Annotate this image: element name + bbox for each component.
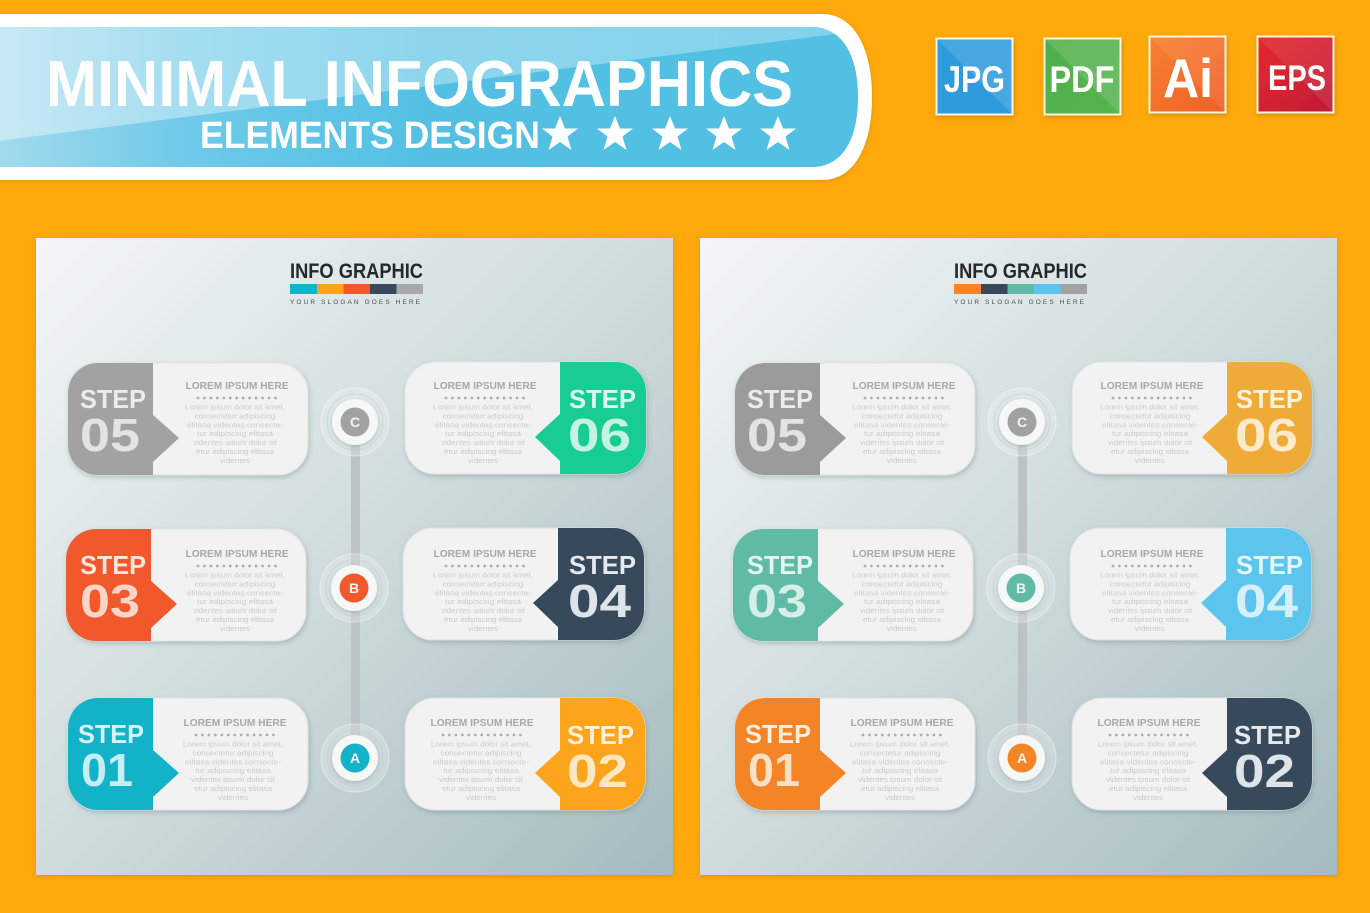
card: step 06: videntes ipsum dolor sit (1108, 438, 1193, 447)
card: step 04: Lorem ipsum dolor sit amet, (433, 570, 533, 580)
card: step 03 (66, 529, 306, 641)
marker A: A (350, 750, 360, 766)
card: step 04: STEP (1236, 550, 1303, 580)
heading: right panel: INFO GRAPHIC (954, 259, 1087, 283)
card: step 01: videntes (885, 793, 915, 802)
card: step 03: etur adipiscing elitasa (863, 615, 942, 624)
card: step 05: STEP (80, 384, 146, 414)
card: step 05: Lorem ipsum dolor sit amet, (185, 402, 285, 412)
heading: left panel: INFO GRAPHIC (290, 259, 423, 283)
card: step 02: etur adipiscing elitasa (1109, 784, 1188, 793)
heading: right panel: YOUR SLOGAN GOES HERE (954, 299, 1085, 306)
card: step 03: tur adipiscing elitasa (864, 597, 941, 606)
card: step 02: tur adipiscing elitasa (443, 766, 520, 775)
card: step 02: 02 (1234, 745, 1295, 797)
card: step 02: 02 (567, 745, 628, 797)
card: step 06: STEP (569, 384, 636, 414)
card: step 05 (68, 363, 308, 475)
card: step 01: etur adipiscing elitasa (194, 784, 273, 793)
card: step 01: elitasa videntes consecte- (852, 757, 949, 766)
banner subtitle: ELEMENTS DESIGN (200, 115, 540, 157)
card: step 03: consectetur adipiscing (862, 579, 942, 588)
card: step 06: etur adipiscing elitasa (444, 447, 523, 456)
card: step 05: tur adipiscing elitasa (197, 429, 274, 438)
card: step 02: videntes (466, 793, 496, 802)
card: step 04: videntes (1135, 624, 1165, 633)
card: step 02 (1072, 698, 1312, 810)
card: step 01 (735, 698, 975, 810)
card: step 05: etur adipiscing elitasa (863, 447, 942, 456)
marker C: C (350, 414, 360, 430)
card: step 05 (735, 363, 975, 475)
card: step 02: videntes ipsum dolor sit (1106, 775, 1191, 784)
card: step 06: tur adipiscing elitasa (445, 429, 522, 438)
marker B (320, 554, 388, 622)
card: step 02: STEP (567, 720, 634, 750)
marker C (988, 388, 1056, 456)
card: step 05: videntes (220, 456, 250, 465)
card: step 04: etur adipiscing elitasa (1111, 615, 1190, 624)
card: step 03: STEP (747, 550, 813, 580)
card: step 01: Lorem ipsum dolor sit amet, (850, 740, 950, 748)
card: step 06: videntes ipsum dolor sit (441, 438, 526, 447)
card: step 01: consectetur adipiscing (192, 748, 274, 757)
card: step 04: tur adipiscing elitasa (1112, 597, 1189, 606)
card: step 02: elitasa videntes consecte- (433, 757, 530, 766)
card: step 04: consectetur adipiscing (442, 579, 524, 588)
icon: Ai: Ai (1163, 47, 1213, 109)
card: step 03: videntes (220, 624, 250, 633)
card: step 04: LOREM IPSUM HERE (1100, 548, 1204, 560)
card: step 05: tur adipiscing elitasa (864, 429, 941, 438)
card: step 05: videntes ipsum dolor sit (193, 438, 278, 447)
card: step 04: 04 (1235, 575, 1299, 627)
card: step 02 (405, 698, 645, 810)
card: step 06: tur adipiscing elitasa (1112, 429, 1189, 438)
heading: left panel (290, 259, 423, 306)
card: step 06: LOREM IPSUM HERE (1100, 380, 1204, 392)
card: step 02: videntes (1133, 793, 1163, 802)
card: step 01: STEP (78, 719, 144, 749)
card: step 04 (1070, 528, 1311, 640)
card: step 04: videntes ipsum dolor sit (1108, 606, 1193, 615)
card: step 06: elitasa videntes consecte- (1102, 420, 1199, 429)
card: step 04: etur adipiscing elitasa (444, 615, 523, 624)
icon: PDF (1044, 38, 1120, 114)
card: step 05: Lorem ipsum dolor sit amet, (852, 402, 952, 412)
marker C: C (1017, 414, 1027, 430)
icon: EPS: EPS (1268, 59, 1326, 98)
card: step 04: LOREM IPSUM HERE (434, 548, 536, 560)
card: step 06 (405, 362, 646, 474)
card: step 01: elitasa videntes consecte- (185, 757, 282, 766)
card: step 06: consectetur adipiscing (1110, 411, 1190, 420)
card: step 01 (68, 698, 308, 810)
card: step 03: etur adipiscing elitasa (196, 615, 275, 624)
card: step 03: STEP (80, 550, 146, 580)
icon: JPG (936, 38, 1012, 114)
card: step 03: 03 (80, 575, 140, 627)
card: step 05: LOREM IPSUM HERE (186, 380, 288, 392)
card: step 03: elitasa videntes consecte- (187, 588, 284, 597)
panel: left infographic (36, 238, 673, 875)
icon: EPS (1258, 36, 1334, 112)
card: step 01: 01 (748, 744, 800, 796)
card: step 06: etur adipiscing elitasa (1111, 447, 1190, 456)
card: step 01: videntes (218, 793, 248, 802)
card: step 06: videntes (1135, 456, 1165, 465)
card: step 04: consectetur adipiscing (1110, 579, 1190, 588)
card: step 02: Lorem ipsum dolor sit amet, (431, 740, 531, 748)
card: step 02: consectetur adipiscing (440, 748, 522, 757)
card: step 01: LOREM IPSUM HERE (184, 717, 286, 729)
card: step 02: consectetur adipiscing (1108, 748, 1188, 757)
card: step 03: elitasa videntes consecte- (854, 588, 951, 597)
card: step 04: elitasa videntes consecte- (435, 588, 532, 597)
card: step 06: Lorem ipsum dolor sit amet, (433, 402, 533, 412)
card: step 03 (733, 529, 973, 641)
card: step 05: etur adipiscing elitasa (196, 447, 275, 456)
card: step 06: Lorem ipsum dolor sit amet, (1100, 402, 1200, 412)
marker A: A (1017, 750, 1027, 766)
card: step 02: videntes ipsum dolor sit (439, 775, 524, 784)
marker B: B (349, 580, 359, 596)
card: step 04: 04 (568, 575, 632, 627)
marker A (321, 724, 389, 792)
card: step 05: elitasa videntes consecte- (854, 420, 951, 429)
card: step 03: videntes ipsum dolor sit (860, 606, 945, 615)
card: step 02: LOREM IPSUM HERE (1098, 717, 1200, 729)
card: step 06: STEP (1236, 384, 1303, 414)
timeline connector (351, 422, 360, 758)
card: step 05: elitasa videntes consecte- (187, 420, 284, 429)
icon: Ai (1150, 36, 1226, 112)
heading: right panel (954, 259, 1087, 306)
card: step 02: STEP (1234, 720, 1301, 750)
card: step 06: elitasa videntes consecte- (435, 420, 532, 429)
card: step 06: consectetur adipiscing (442, 411, 524, 420)
card: step 06: videntes (468, 456, 498, 465)
card: step 01: consectetur adipiscing (860, 748, 940, 757)
card: step 04: tur adipiscing elitasa (445, 597, 522, 606)
card: step 01: Lorem ipsum dolor sit amet, (183, 740, 283, 748)
card: step 05: 05 (747, 409, 807, 461)
card: step 03: consectetur adipiscing (194, 579, 276, 588)
card: step 05: consectetur adipiscing (862, 411, 942, 420)
rating stars (542, 116, 796, 150)
card: step 04: Lorem ipsum dolor sit amet, (1100, 570, 1200, 580)
marker B: B (1016, 580, 1026, 596)
marker B (987, 554, 1055, 622)
card: step 03: Lorem ipsum dolor sit amet, (185, 570, 285, 580)
card: step 01: videntes ipsum dolor sit (858, 775, 943, 784)
card: step 01: LOREM IPSUM HERE (850, 717, 954, 729)
card: step 01: STEP (745, 719, 811, 749)
card: step 02: LOREM IPSUM HERE (430, 717, 534, 729)
card: step 04: elitasa videntes consecte- (1102, 588, 1199, 597)
card: step 01: tur adipiscing elitasa (862, 766, 939, 775)
card: step 05: videntes (887, 456, 917, 465)
card: step 03: 03 (747, 575, 807, 627)
card: step 04: STEP (569, 550, 636, 580)
card: step 03: videntes ipsum dolor sit (193, 606, 278, 615)
card: step 05: STEP (747, 384, 813, 414)
card: step 04 (403, 528, 644, 640)
card: step 03: LOREM IPSUM HERE (852, 548, 956, 560)
card: step 02: Lorem ipsum dolor sit amet, (1098, 740, 1198, 748)
panel: right infographic (700, 238, 1337, 875)
card: step 06: 06 (1235, 409, 1298, 461)
marker C (321, 388, 389, 456)
card: step 03: LOREM IPSUM HERE (186, 548, 288, 560)
card: step 03: videntes (887, 624, 917, 633)
card: step 01: videntes ipsum dolor sit (191, 775, 276, 784)
marker A (988, 724, 1056, 792)
card: step 06: 06 (568, 409, 631, 461)
card: step 02: tur adipiscing elitasa (1110, 766, 1187, 775)
card: step 05: consectetur adipiscing (194, 411, 276, 420)
timeline connector (1018, 422, 1027, 758)
card: step 06 (1072, 362, 1312, 474)
card: step 03: Lorem ipsum dolor sit amet, (852, 570, 952, 580)
card: step 05: videntes ipsum dolor sit (860, 438, 945, 447)
card: step 01: tur adipiscing elitasa (195, 766, 272, 775)
card: step 02: etur adipiscing elitasa (442, 784, 521, 793)
icon: PDF: PDF (1050, 59, 1114, 100)
card: step 05: LOREM IPSUM HERE (852, 380, 956, 392)
heading: left panel: YOUR SLOGAN GOES HERE (290, 299, 421, 306)
card: step 04: videntes (468, 624, 498, 633)
card: step 05: 05 (80, 409, 140, 461)
card: step 01: 01 (81, 744, 133, 796)
card: step 06: LOREM IPSUM HERE (434, 380, 536, 392)
card: step 02: elitasa videntes consecte- (1100, 757, 1197, 766)
icon: JPG: JPG (944, 59, 1005, 100)
card: step 04: videntes ipsum dolor sit (441, 606, 526, 615)
banner (0, 14, 872, 180)
banner title: MINIMAL INFOGRAPHICS (46, 47, 793, 120)
card: step 01: etur adipiscing elitasa (861, 784, 940, 793)
card: step 03: tur adipiscing elitasa (197, 597, 274, 606)
